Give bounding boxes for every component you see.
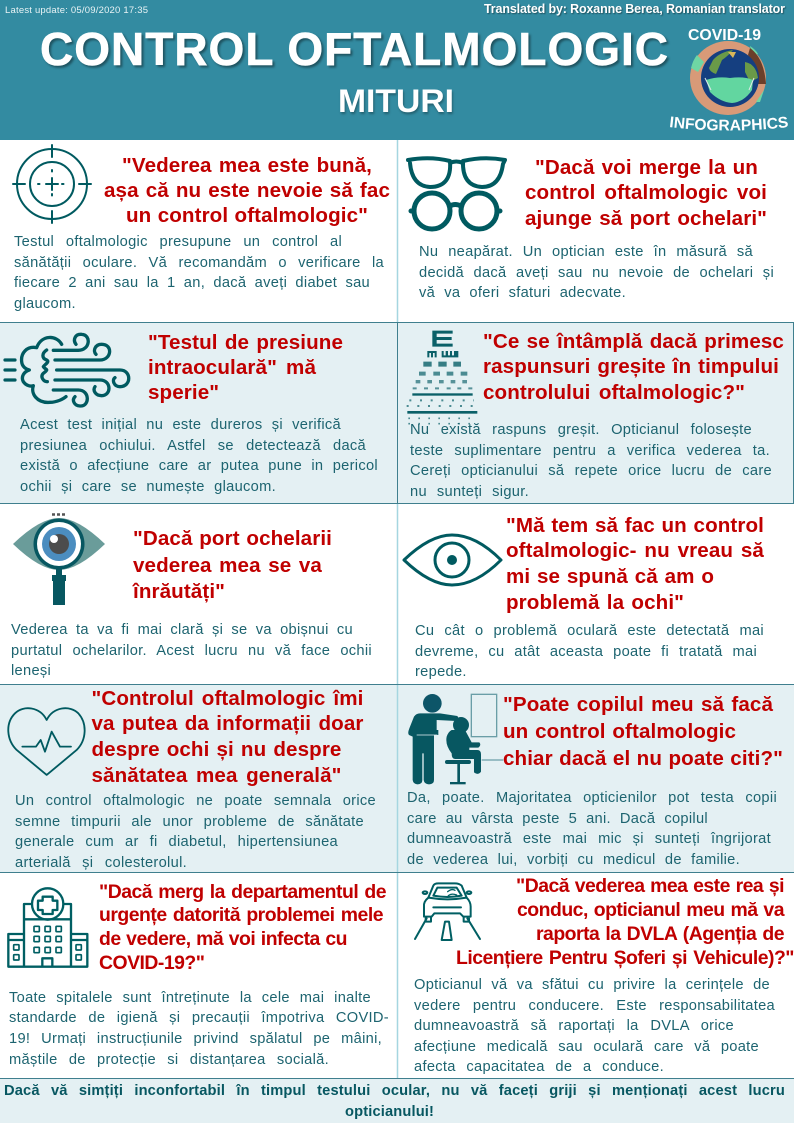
heading: înrăutăți": [133, 580, 225, 603]
heading: "Poate copilul meu să facă: [503, 693, 773, 716]
icon: eye under magnifier: [13, 513, 105, 605]
body text: de vederea lui, vorbiți cu medicul de familie.: [407, 852, 740, 868]
panel: wrong answers: [397, 322, 794, 503]
body text: [11, 622, 372, 679]
heading: [104, 154, 390, 227]
heading: "Testul de presiune: [148, 331, 343, 354]
heading: "Dacă vederea mea este rea și: [516, 875, 784, 897]
body text: nu sunteți sigur.: [410, 484, 529, 500]
body text: sănătății oculare. Vă recomandăm o verificare la: [14, 255, 384, 271]
panel: driving and DVLA: [414, 875, 794, 1075]
icon: air puff: [3, 332, 130, 408]
body text: Nu există raspuns greșit. Opticianul folosește: [410, 422, 752, 438]
body text: [14, 234, 384, 312]
logo caption top: COVID-19: [688, 27, 761, 44]
panel: vision is good: [12, 144, 390, 312]
body text: afecțiune medicală sau oculară care vă poate: [414, 1039, 759, 1055]
body text: [414, 977, 775, 1075]
body text: Nu neapărat. Un optician este în măsură să: [419, 244, 753, 260]
body text: [410, 422, 772, 500]
body text: [20, 417, 378, 495]
body text: semne timpurii ale unor probleme de sănătate: [15, 814, 364, 830]
body text: afecta capacitatea de a conduce.: [414, 1059, 664, 1075]
body text: [407, 790, 777, 868]
title: CONTROL OFTALMOLOGIC: [40, 23, 668, 75]
heading: problemă la ochi": [506, 591, 684, 614]
heading: raspunsuri greșite în timpului: [483, 355, 779, 378]
body text: Opticianul vă va sfătui cu privire la cerințele de: [414, 977, 770, 993]
heading: [503, 693, 783, 770]
icon: target reticle: [12, 144, 92, 224]
body text: ochii și care se numește glaucom.: [20, 479, 276, 495]
panel: fear of problem: [402, 514, 764, 680]
body text: [415, 623, 764, 680]
body text: dumneavoastră să raportați la DVLA orice: [414, 1018, 734, 1034]
icon: heart with pulse: [7, 707, 86, 776]
body text: leneși: [11, 663, 51, 679]
heading: "Controlul oftalmologic îmi: [92, 687, 364, 710]
footer note: Dacă vă simțiți inconfortabil în timpul testului ocular, nu vă faceți griji și menționați acest lucru: [4, 1083, 785, 1099]
heading: despre ochi și nu despre: [92, 738, 342, 761]
heading: [99, 881, 386, 974]
body text: vedere pentru conducere. Este responsabilitatea: [414, 998, 775, 1014]
body text: Da, poate. Majoritatea opticienilor pot testa copii: [407, 790, 777, 806]
icon: hospital: [7, 887, 88, 968]
heading: raporta la DVLA (Agenția de: [536, 923, 784, 945]
heading: [148, 331, 343, 404]
heading: [483, 330, 784, 404]
footer note: [0, 1079, 794, 1123]
logo caption bottom: INFOGRAPHICS: [670, 116, 788, 130]
heading: [506, 514, 764, 614]
heading: urgențe datorită problemei mele: [99, 904, 383, 926]
heading: chiar dacă el nu poate citi?": [503, 747, 783, 770]
heading: va putea da informații doar: [92, 712, 364, 735]
header banner: [0, 0, 794, 140]
heading: un control oftalmologic": [126, 204, 368, 227]
panel: glasses worsen vision: [11, 513, 372, 679]
body text: [15, 793, 376, 871]
heading: sperie": [148, 381, 219, 404]
body text: presiunea ochiului. Astfel se detectează dacă: [20, 438, 366, 454]
body text: [419, 244, 774, 301]
heading: COVID-19?": [99, 952, 204, 974]
heading: așa că nu este nevoie să fac: [104, 179, 390, 202]
heading: "Dacă merg la departamentul de: [99, 881, 386, 903]
translator credit: Translated by: Roxanne Berea, Romanian translator: [484, 2, 785, 16]
icon: car on road: [414, 882, 481, 941]
heading: "Ce se întâmplă dacă primesc: [483, 330, 784, 353]
body text: care au vârsta peste 5 ani. Dacă copilul: [407, 811, 708, 827]
body text: purtatul ochelarilor. Acest lucru nu vă face ochii: [11, 643, 372, 659]
body text: generale cum ar fi diabetul, hipertensiunea: [15, 834, 338, 850]
heading: [456, 875, 794, 969]
body text: există o afecțiune care ar putea pune in pericol: [20, 458, 378, 474]
body text: Vederea ta va fi mai clară și se va obișnui cu: [11, 622, 353, 638]
body text: standarde de igienă și precauții împotriva COVID-: [9, 1010, 389, 1026]
heading: Licențiere Pentru Șoferi și Vehicule)?": [456, 947, 794, 969]
icon: eye outline: [402, 534, 503, 586]
body text: Acest test inițial nu este dureros și verifică: [20, 417, 341, 433]
last update stamp: Latest update: 05/09/2020 17:35: [5, 5, 148, 16]
icon: two pairs of glasses: [406, 156, 507, 232]
panel: general health: [0, 684, 397, 872]
body text: vă va oferi sfaturi adecvate.: [419, 285, 626, 301]
footer note: opticianului!: [345, 1104, 434, 1120]
panel: pressure test: [0, 322, 397, 503]
heading: intraoculară" mă: [148, 356, 316, 379]
body text: Cereți opticianului să repete orice lucru de care: [410, 463, 772, 479]
panel: emergency department: [7, 881, 389, 1068]
body text: Un control oftalmologic ne poate semnala orice: [15, 793, 376, 809]
subtitle: MITURI: [338, 83, 454, 119]
body text: devreme, cu atât aceasta poate fi tratată mai: [415, 644, 757, 660]
panel: glasses: [406, 156, 774, 301]
heading: un control oftalmologic: [503, 720, 736, 743]
body text: glaucom.: [14, 296, 76, 312]
body text: măștile de protecție si distanțarea socială.: [9, 1052, 329, 1068]
heading: oftalmologic- nu vreau să: [506, 539, 764, 562]
heading: ajunge să port ochelari": [525, 207, 767, 230]
heading: control oftalmologic voi: [525, 181, 767, 204]
heading: [132, 527, 332, 603]
body text: teste suplimentare pentru a verifica vederea ta.: [410, 443, 770, 459]
icon: optician with child: [408, 694, 504, 784]
body text: Cu cât o problemă oculară este detectată mai: [415, 623, 764, 639]
body text: 19! Urmați instrucțiunile privind spălatul pe mâini,: [9, 1031, 382, 1047]
logo caption bottom: [670, 116, 788, 130]
heading: controlului oftalmologic?": [483, 381, 745, 404]
heading: sănătatea mea generală": [92, 764, 342, 787]
heading: conduc, opticianul meu mă va: [517, 899, 784, 921]
heading: mi se spună că am o: [506, 565, 714, 588]
heading: [525, 156, 767, 230]
body text: fiecare 2 ani sau la 1 an, dacă aveți diabet sau: [14, 275, 370, 291]
heading: vederea mea se va: [133, 554, 322, 577]
body text: decidă dacă aveți sau nu nevoie de ochelari și: [419, 265, 774, 281]
body text: repede.: [415, 664, 467, 680]
icon: eye chart: [406, 330, 478, 424]
body text: Toate spitalele sunt întreținute la cele mai inalte: [9, 990, 371, 1006]
heading: "Dacă port ochelarii: [133, 527, 332, 550]
heading: "Dacă voi merge la un: [535, 156, 758, 179]
heading: [92, 687, 364, 787]
heading: "Mă tem să fac un control: [506, 514, 764, 537]
heading: de vedere, mă voi infecta cu: [99, 928, 347, 950]
panel: child test: [397, 684, 794, 872]
body text: arterială și colesterolul.: [15, 855, 187, 871]
body text: [9, 990, 389, 1068]
icon: globe with mask and hands: [690, 41, 766, 115]
heading: "Vederea mea este bună,: [122, 154, 372, 177]
body text: dumneavoastră este mai mic și sunteți îngrijorat: [407, 831, 771, 847]
body text: Testul oftalmologic presupune un control al: [14, 234, 342, 250]
